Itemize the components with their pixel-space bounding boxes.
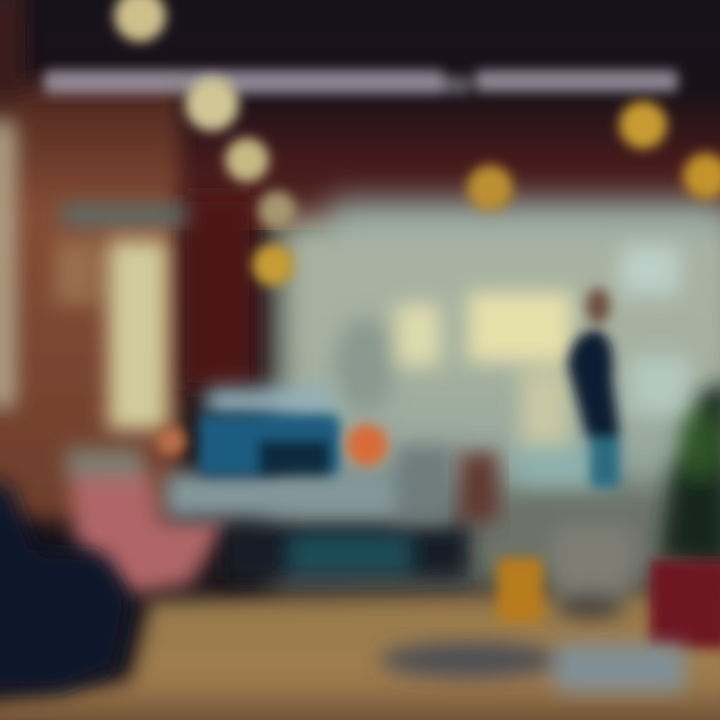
machine dark base (225, 520, 470, 580)
red plant pot (650, 560, 720, 648)
papers on table (380, 642, 685, 692)
title band (44, 70, 678, 94)
person standing (568, 288, 620, 488)
bright windows (335, 245, 690, 485)
back wall (270, 200, 720, 590)
orange glass (497, 558, 543, 622)
machine blue panel (198, 414, 340, 476)
blue machine (156, 388, 470, 580)
gray object on table (552, 525, 634, 619)
orange lamp right (346, 424, 388, 466)
pink chair (66, 448, 230, 595)
dark red pillar (180, 195, 256, 390)
dark armchair (0, 480, 130, 690)
machine light body (165, 388, 455, 525)
plant (660, 380, 720, 570)
left window (55, 205, 187, 430)
brick wall left (0, 0, 180, 520)
pendant lights (114, 0, 720, 286)
table (0, 590, 720, 720)
ceiling (0, 0, 720, 230)
orange lamp left (156, 426, 186, 456)
small brown stool (460, 452, 498, 522)
